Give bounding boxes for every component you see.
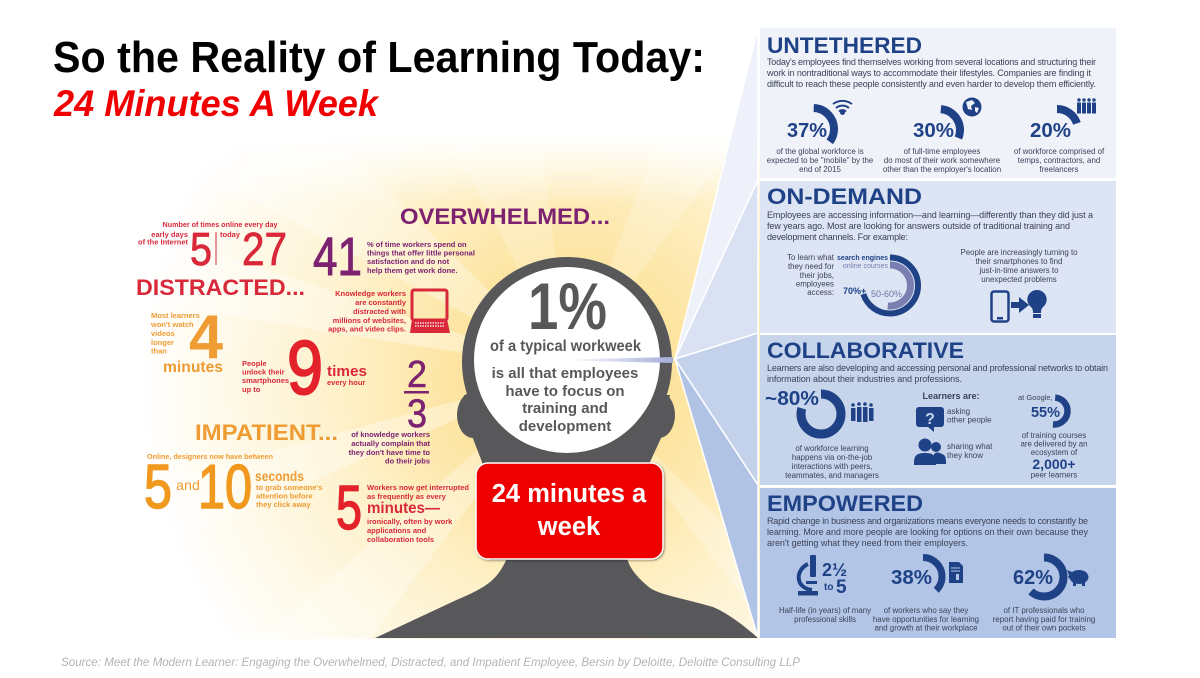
stat: unlock 9 times: 9 — [287, 326, 323, 411]
description — [767, 363, 1108, 384]
stat: 4 minutes: won't watch — [150, 320, 194, 329]
stat: 20 percent: 20% — [1030, 120, 1071, 142]
sunburst background — [130, 135, 760, 639]
stat: 62 percent: of IT professionals who — [1004, 606, 1085, 615]
stat: interrupted every 5 minutes — [336, 474, 469, 544]
stat: 30 percent — [883, 107, 1001, 174]
donut chart: search engines and online courses: 70%+ — [843, 286, 866, 296]
stat: half-life of skills: professional skills — [794, 615, 856, 624]
stat: two thirds: actually complain that — [351, 439, 430, 448]
stat: 55 percent at Google: are delivered by an — [1020, 440, 1088, 448]
stat: times online: 27 — [242, 223, 287, 275]
white circle with 1 percent message — [474, 267, 673, 453]
stat: knowledge workers distracted: millions of websites, — [333, 316, 406, 325]
learners are: list: other people — [947, 416, 992, 424]
stat: 55 percent at Google: of training courses — [1022, 431, 1086, 440]
text: employees access: To learn what — [787, 253, 835, 262]
stat: knowledge workers distracted: are constantly — [355, 298, 407, 307]
stat: interrupted every 5 minutes: minutes— — [367, 500, 440, 517]
description — [766, 57, 1096, 89]
icon: people sharing — [914, 438, 946, 465]
stat: two thirds: 2 — [407, 354, 427, 396]
stat: unlock 9 times — [242, 326, 367, 411]
stat: 55 percent at Google: ecosystem of — [1031, 448, 1078, 457]
stat: two thirds: they don't have time to — [349, 448, 430, 457]
heading: UNTETHERED — [767, 33, 922, 58]
text: smartphones — [960, 248, 1078, 284]
message: is all that employees — [492, 365, 638, 382]
stat: times online — [138, 220, 287, 275]
pointer bar — [567, 357, 673, 363]
stat: unlock 9 times: unlock their — [242, 368, 285, 376]
red callout: 24 minutes a week: 24 minutes a — [492, 480, 647, 508]
stat: 41 percent: satisfaction and do not — [367, 257, 450, 266]
stat: 4 minutes — [150, 303, 224, 376]
stat: 4 minutes: minutes — [163, 359, 223, 376]
panel: empowered — [760, 488, 1116, 638]
subtitle: 24 Minutes A Week — [53, 82, 380, 124]
stat: interrupted every 5 minutes: collaboration tools — [367, 535, 434, 544]
stat: 4 minutes: 4 — [189, 303, 224, 372]
heading: overwhelmed: OVERWHELMED... — [400, 204, 610, 229]
stat: knowledge workers distracted: apps, and video clips. — [328, 324, 406, 334]
icon: globe — [962, 98, 982, 116]
text: smartphones: their smartphones to find — [976, 257, 1062, 266]
icon: piggy bank — [1067, 570, 1088, 586]
stat: 20 percent — [1014, 109, 1105, 174]
stat: 37 percent: 37% — [787, 120, 827, 142]
stat: 80 percent: interactions with peers, — [792, 462, 872, 471]
red callout: 24 minutes a week: week — [537, 513, 601, 541]
stat: 38 percent: have opportunities for learning — [873, 615, 979, 624]
icon: workers group — [1077, 98, 1096, 114]
description: aren't getting what they need from their employers. — [767, 538, 968, 548]
description — [767, 516, 1088, 548]
learners are: list: sharing what — [947, 442, 993, 451]
message: training and — [522, 400, 608, 417]
learners are: list: Learners are: — [922, 391, 980, 401]
stat: 55 percent at Google: at Google, — [1018, 393, 1053, 402]
icon: team of people — [851, 402, 874, 422]
heading: EMPOWERED — [767, 491, 923, 516]
text: smartphones: unexpected problems — [981, 275, 1057, 284]
stat: interrupted every 5 minutes: ironically, often by work — [367, 517, 453, 526]
icon: document — [949, 562, 963, 583]
stat: 55 percent at Google — [1018, 393, 1088, 480]
red callout: 24 minutes a week — [476, 463, 663, 559]
stat: 30 percent: 30% — [913, 120, 954, 142]
stat: 4 minutes: than — [151, 346, 167, 356]
stat: 55 percent at Google: 55% — [1031, 404, 1060, 421]
stat: 4 minutes: Most learners — [151, 311, 200, 320]
stat: times online: 5 — [190, 223, 212, 275]
donut chart: search engines and online courses: search engines — [837, 255, 888, 262]
stat: 80 percent: teammates, and managers — [785, 471, 879, 480]
stat: 37 percent: expected to be "mobile" by the — [767, 156, 874, 165]
source note: Source: Meet the Modern Learner: Engaging the Overwhelmed, Distracted, and Impatient Employee, Bersin by Deloitte, Deloitte Consulting LLP — [61, 655, 800, 669]
stat: 80 percent: ~80% — [765, 388, 819, 410]
icon: laptop — [410, 290, 450, 333]
stat: interrupted every 5 minutes: Workers now get interrupted — [367, 483, 469, 492]
stat: 38 percent — [873, 558, 979, 632]
stat: two thirds — [349, 354, 430, 466]
stat: two thirds: do their jobs — [385, 456, 430, 466]
text: smartphones: People are increasingly turning to — [960, 248, 1078, 257]
panel: collaborative — [760, 335, 1116, 485]
stat: 41 percent: things that offer little personal — [367, 248, 475, 258]
big number: 1% — [528, 269, 607, 343]
stat: 37 percent: of the global workforce is — [776, 147, 864, 156]
stat: two thirds: 3 — [407, 392, 427, 436]
stat: times online: early days — [151, 230, 188, 239]
stat: interrupted every 5 minutes: applications and — [367, 526, 427, 535]
description: Rapid change in business and organizations means everyone needs to constantly be — [767, 516, 1088, 526]
stat: 5 and 10 seconds: seconds — [255, 468, 304, 484]
stat: 5 and 10 seconds: they click away — [256, 500, 311, 509]
stat: half-life of skills: 5 — [836, 577, 847, 598]
stat: 20 percent: temps, contractors, and — [1018, 156, 1100, 165]
stat: 5 and 10 seconds: attention before — [256, 492, 313, 500]
stat: half-life of skills: to — [824, 582, 833, 593]
description: Learners are also developing and accessing personal and professional networks to obtain — [767, 363, 1108, 373]
stat: knowledge workers distracted: distracted with — [353, 307, 406, 316]
text: employees access: their jobs, — [800, 271, 834, 280]
heading: impatient: IMPATIENT... — [195, 420, 338, 445]
stat: 41 percent: % of time workers spend on — [367, 240, 467, 249]
text: smartphones: just-in-time answers to — [979, 266, 1059, 275]
stat: knowledge workers distracted — [328, 289, 407, 334]
stat: 37 percent: end of 2015 — [799, 165, 841, 174]
text: employees access: access: — [807, 288, 834, 297]
stat: 30 percent: do most of their work somewhere — [884, 156, 1001, 165]
stat: 5 and 10 seconds: and — [176, 477, 200, 493]
stat: 62 percent: 62% — [1013, 567, 1053, 589]
caption: of a typical workweek — [490, 338, 641, 355]
heading: distracted: DISTRACTED... — [136, 275, 305, 300]
icon: phone, arrow and light bulb — [992, 290, 1047, 322]
description — [767, 210, 1093, 242]
stat: 80 percent: of workforce learning — [795, 444, 869, 453]
stat: 38 percent: 38% — [891, 567, 932, 589]
stat: 62 percent: report having paid for training — [993, 615, 1095, 624]
stat: 38 percent: and growth at their workplace — [874, 624, 978, 632]
message: development — [519, 418, 611, 435]
learners are: list: they know — [947, 451, 983, 460]
stat: 38 percent: of workers who say they — [884, 606, 968, 615]
title: So the Reality of Learning Today: — [53, 33, 705, 82]
heading: ON-DEMAND — [767, 184, 922, 209]
stat: 62 percent: out of their own pockets — [1002, 624, 1086, 632]
description: Employees are accessing information—and learning—differently than they did just a — [767, 210, 1093, 220]
stat: times online: today — [220, 230, 241, 239]
stat: interrupted every 5 minutes: 5 — [336, 474, 362, 543]
stat: 30 percent: of full-time employees — [904, 147, 980, 156]
message: have to focus on — [505, 383, 625, 400]
stat: 62 percent — [993, 558, 1095, 632]
stat: 4 minutes: longer — [151, 338, 174, 347]
stat: half-life of skills: 2½ — [822, 560, 847, 580]
donut chart: search engines and online courses: 50-60% — [871, 289, 902, 299]
description: information about their industries and professions. — [767, 374, 962, 384]
stat: 37 percent — [767, 107, 874, 174]
stat: 5 and 10 seconds: 5 — [144, 453, 172, 522]
description: development channels. For example: — [767, 232, 908, 242]
stat: half-life of skills: Half-life (in years) of many — [779, 606, 871, 615]
stat: knowledge workers distracted: Knowledge workers — [335, 289, 406, 298]
stat: 20 percent: of workforce comprised of — [1014, 147, 1105, 156]
stat: unlock 9 times: People — [242, 359, 267, 368]
description: Today's employees find themselves working from several locations and structuring their — [767, 57, 1096, 67]
stat: interrupted every 5 minutes: as frequently as every — [367, 492, 447, 501]
stat: 5 and 10 seconds: Online, designers now have between — [147, 452, 273, 461]
message — [492, 365, 638, 435]
learners are: list: asking — [947, 407, 970, 416]
donut chart: search engines and online courses: online courses — [843, 263, 888, 270]
stat: 80 percent — [765, 388, 879, 480]
stat: 80 percent: happens via on-the-job — [792, 453, 873, 462]
learners are: list — [914, 391, 993, 465]
stat: unlock 9 times: times — [327, 363, 367, 380]
head silhouette — [375, 257, 758, 638]
icon: wifi — [833, 101, 852, 114]
stat: 5 and 10 seconds — [144, 452, 322, 522]
panel: overwhelmed, distracted, impatient statistics — [136, 204, 610, 544]
description: few years ago. Most are looking for answers outside of traditional training and — [767, 221, 1070, 231]
stat: unlock 9 times: every hour — [327, 378, 365, 387]
stat: 4 minutes: videos — [151, 329, 175, 338]
text: employees access: they need for — [788, 262, 834, 271]
description: work in nontraditional ways to accommodate their lifestyles. Companies are finding it — [766, 68, 1091, 78]
stat: two thirds: of knowledge workers — [351, 430, 430, 439]
stat: 5 and 10 seconds: to grab someone's — [256, 483, 322, 492]
text: employees access — [787, 253, 835, 297]
description: learning. More and more people are looking for options on their own because they — [767, 527, 1088, 537]
stat: times online: of the Internet — [138, 238, 189, 246]
stat: 55 percent at Google: 2,000+ — [1032, 456, 1076, 472]
donut chart: search engines and online courses — [837, 255, 918, 314]
fan connecting the head to the four panels — [675, 28, 758, 638]
stat: 41 percent: help them get work done. — [367, 266, 457, 275]
stat: 5 and 10 seconds: 10 — [198, 453, 252, 522]
stat: unlock 9 times: up to — [242, 385, 261, 394]
text: employees access: employees — [796, 280, 834, 288]
stat: half-life of skills — [779, 555, 871, 624]
stat: 41 percent — [313, 227, 475, 287]
stat: 55 percent at Google: peer learners — [1031, 470, 1077, 480]
heading: COLLABORATIVE — [767, 338, 964, 363]
stat: 41 percent: 41 — [313, 227, 362, 287]
panel: untethered — [760, 28, 1116, 178]
description: difficult to reach these people consistently and even harder to develop them efficiently. — [767, 79, 1096, 89]
icon: microscope — [798, 555, 818, 596]
icon: question bubble: ? — [925, 411, 935, 428]
stat: 30 percent: other than the employer's location — [883, 165, 1001, 174]
stat: 20 percent: freelancers — [1039, 165, 1079, 174]
panel: on-demand — [760, 181, 1116, 333]
stat: times online: Number of times online every day — [162, 220, 278, 229]
stat: unlock 9 times: smartphones — [242, 376, 289, 385]
